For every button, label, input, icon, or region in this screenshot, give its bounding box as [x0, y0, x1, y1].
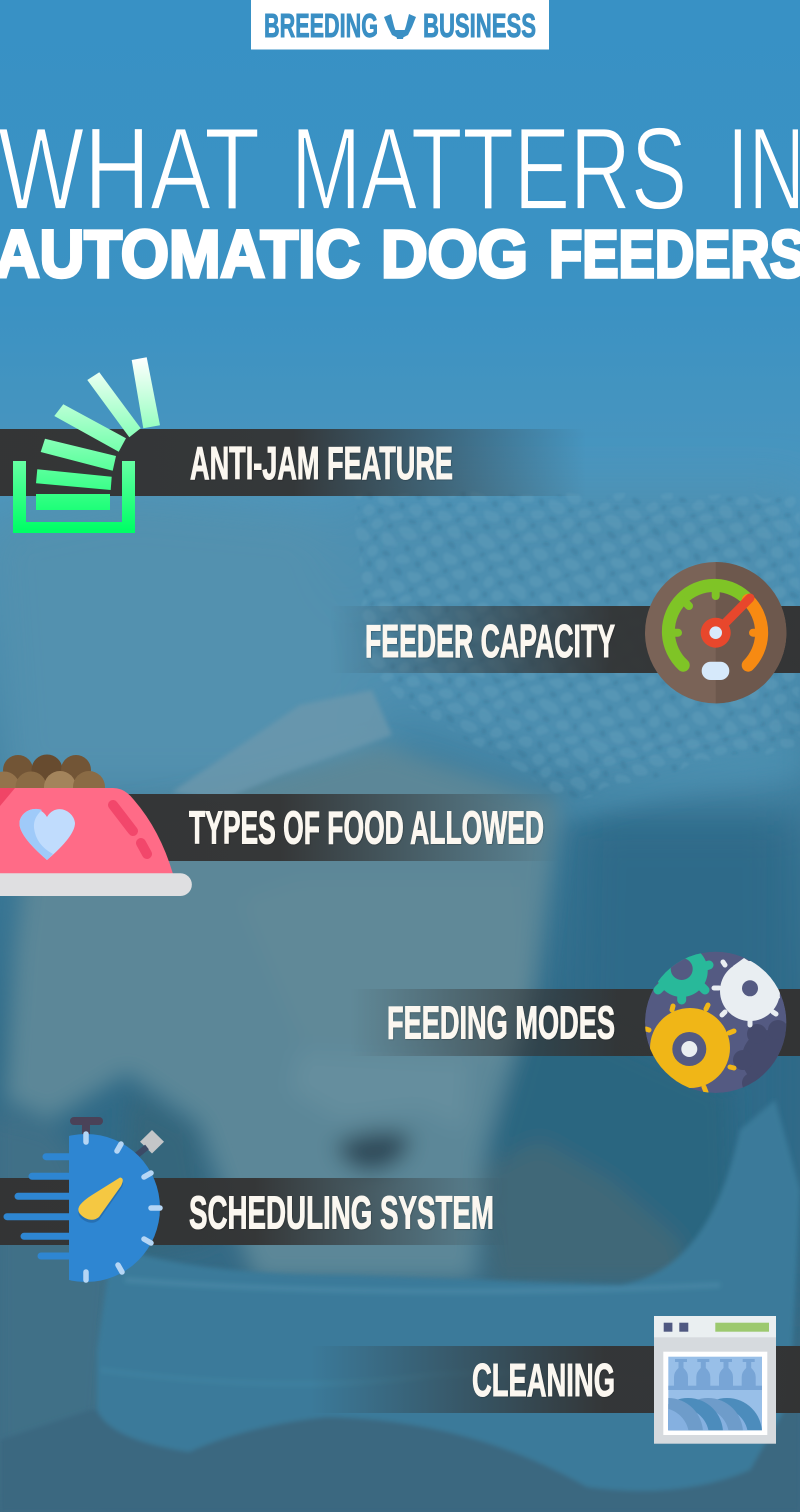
banner: types of food allowed	[0, 794, 560, 861]
icon: stopwatch	[7, 1117, 164, 1282]
banner: anti-jam feature	[0, 429, 586, 496]
label: TYPES OF FOOD ALLOWED	[189, 802, 544, 854]
logo dog head icon	[384, 14, 416, 39]
icon: food slats in tray	[13, 357, 160, 533]
icon: gears	[645, 952, 786, 1093]
white gear	[714, 958, 780, 1025]
label: FEEDING MODES	[387, 996, 615, 1048]
icon: dishwasher	[654, 1316, 776, 1444]
yellow gear	[646, 1005, 734, 1092]
banner: cleaning	[310, 1346, 800, 1413]
label: SCHEDULING SYSTEM	[189, 1186, 494, 1238]
title line 1: WHAT	[0, 103, 260, 234]
icon: gauge	[645, 562, 786, 703]
title line 2: DOG	[381, 217, 528, 292]
banner: scheduling system	[0, 1178, 510, 1245]
banner: feeding modes	[350, 989, 800, 1056]
dark gear	[733, 1020, 786, 1088]
feeder bowl	[0, 1100, 800, 1512]
label: FEEDER CAPACITY	[365, 615, 615, 667]
title line 1	[0, 103, 800, 234]
label: ANTI-JAM FEATURE	[190, 437, 453, 489]
icon: food bowl with heart	[0, 754, 192, 896]
teal gear	[656, 945, 709, 1000]
logo badge	[251, 0, 549, 50]
label: CLEANING	[472, 1354, 615, 1406]
logo wordmark right: BUSINESS	[423, 7, 536, 44]
banner: feeder capacity	[330, 606, 800, 673]
fleece mat texture	[355, 495, 800, 800]
title line 2: AUTOMATIC	[0, 217, 360, 292]
collar strap	[172, 690, 392, 800]
logo wordmark left: BREEDING	[264, 7, 378, 44]
title line 2	[0, 217, 800, 292]
